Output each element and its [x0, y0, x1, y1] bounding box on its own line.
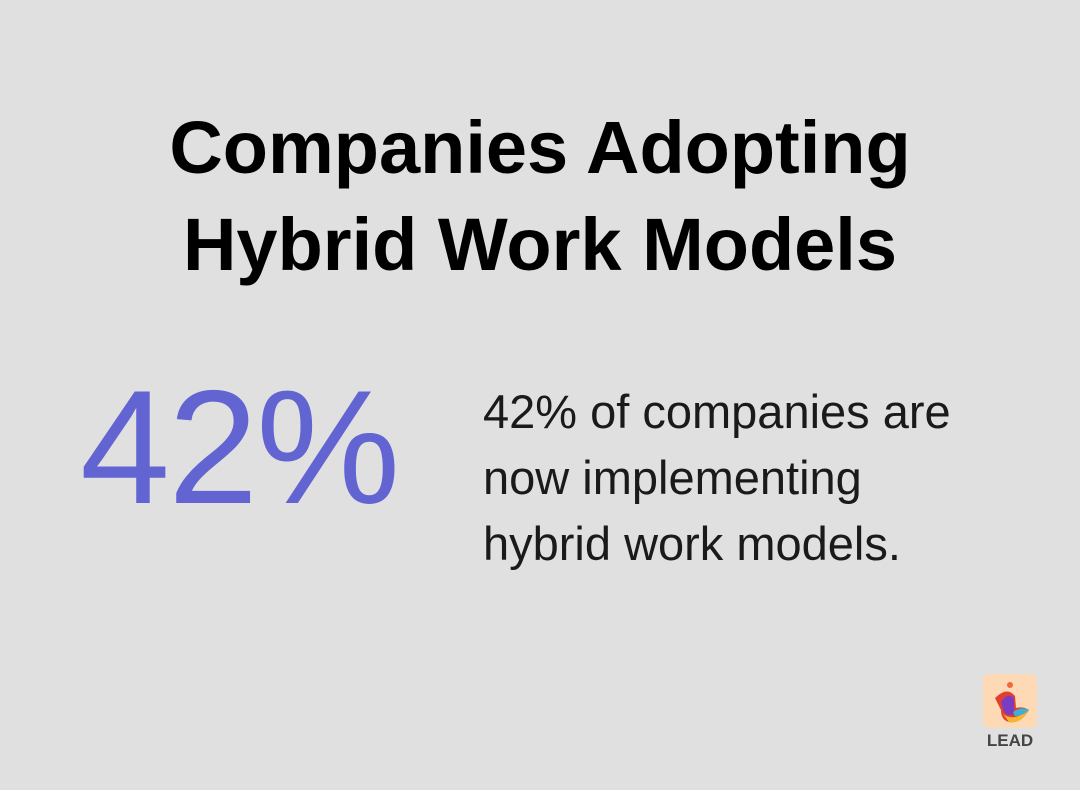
logo: LEAD — [983, 674, 1037, 750]
title: Companies Adopting — [169, 106, 911, 189]
logo: LEAD: LEAD — [987, 731, 1033, 750]
big statistic: 42% — [80, 357, 398, 538]
description text — [483, 385, 951, 570]
description text: hybrid work models. — [483, 517, 901, 570]
description text: now implementing — [483, 451, 862, 504]
description text: 42% of companies are — [483, 385, 951, 438]
title — [169, 106, 911, 286]
title: Hybrid Work Models — [183, 203, 897, 286]
